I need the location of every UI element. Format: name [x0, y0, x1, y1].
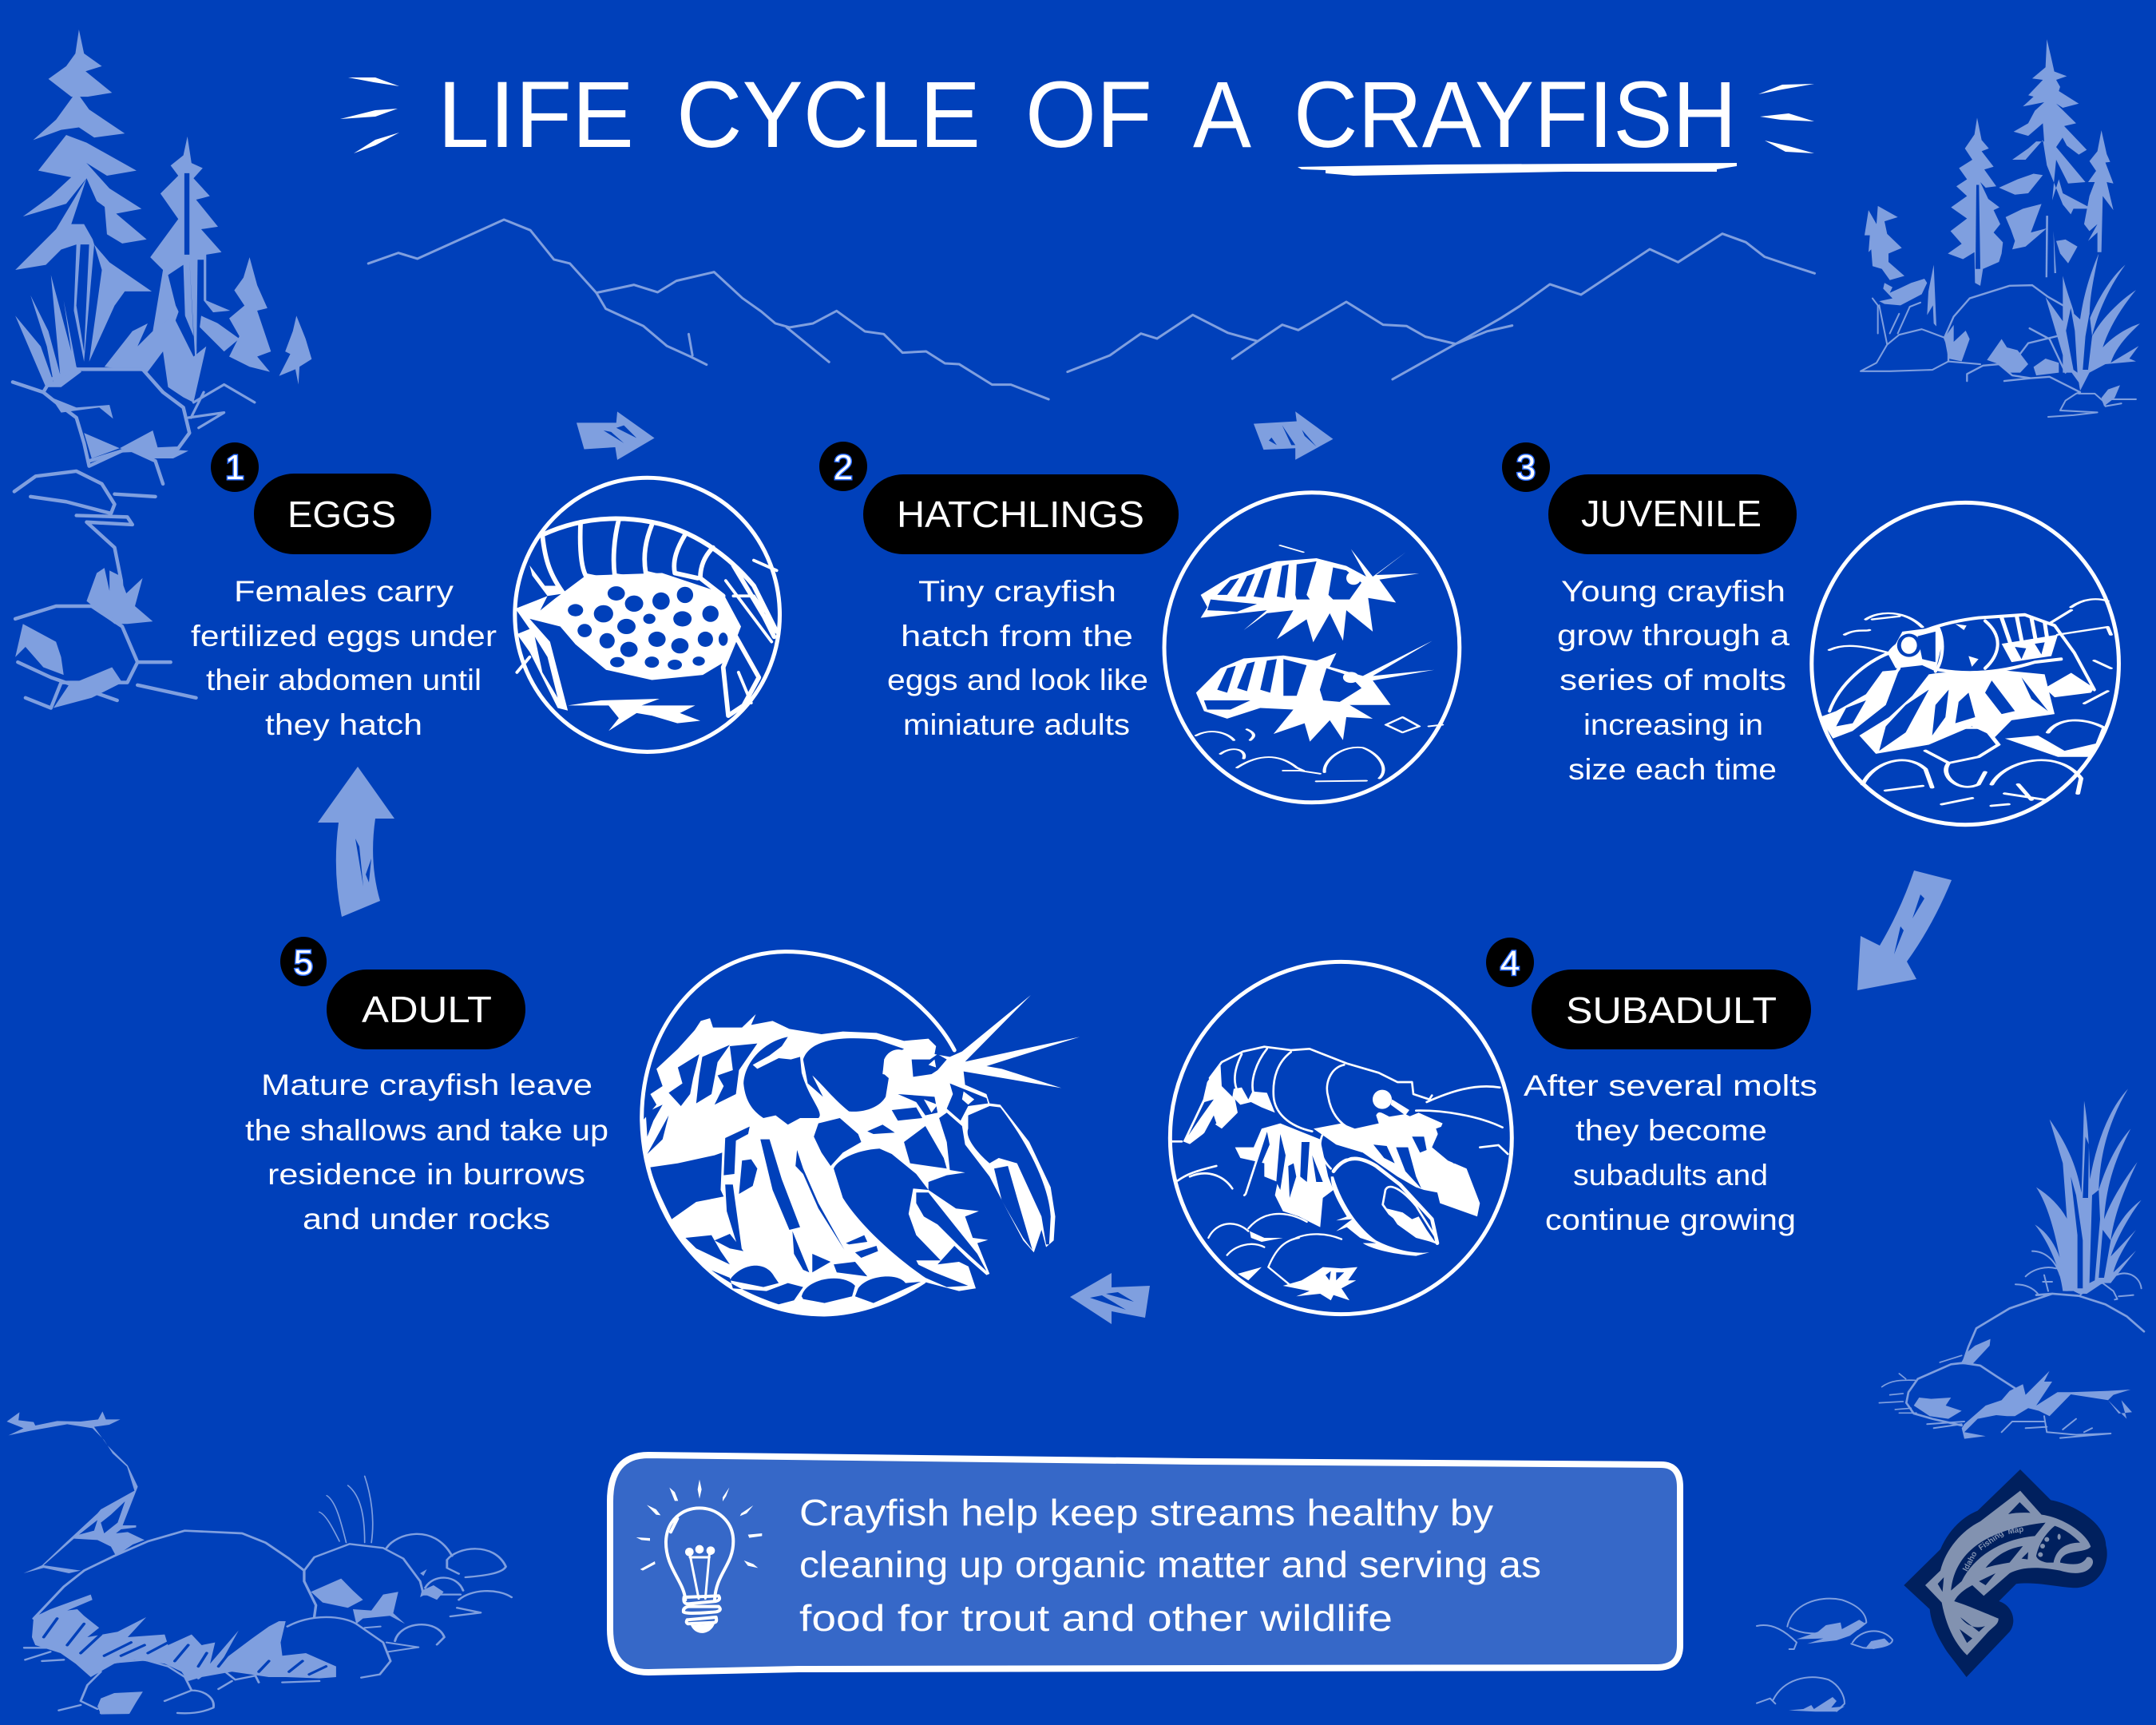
stage 3 description: increasing in: [1583, 708, 1763, 741]
title underline: [1298, 163, 1737, 176]
arrow: subadult to adult: [1070, 1273, 1150, 1324]
stage 5 description: residence in burrows: [268, 1158, 585, 1191]
stage 4 number badge: [1486, 938, 1534, 987]
title: [438, 62, 1737, 168]
stage 5 description: and under rocks: [303, 1203, 550, 1235]
stage 2: hatchlings: [819, 442, 1460, 803]
arrow: adult back to eggs: [318, 767, 394, 917]
stage 5 number badge: 5: [294, 943, 313, 982]
stage 1 description: they hatch: [265, 708, 422, 741]
logo: Idaho Fishing Map leaping fish: Idaho: [1961, 1550, 1979, 1573]
arrow: hatchlings to juvenile: [1254, 411, 1333, 460]
stage 5: adult: [245, 937, 1080, 1315]
stage 2 description: hatch from the: [901, 620, 1133, 652]
stage 3 number badge: 3: [1516, 448, 1536, 487]
stage 3 label pill: JUVENILE: [1581, 493, 1762, 534]
stage 4: subadult: [1170, 938, 1817, 1315]
logo: Idaho Fishing Map leaping fish: Map: [2007, 1525, 2024, 1537]
scenery: mountain range outlines: [368, 220, 1815, 399]
title: A: [1193, 62, 1251, 168]
stage 3: juvenile: [1502, 442, 2118, 825]
icon: light bulb: [636, 1480, 762, 1633]
stage 2 label pill: [863, 474, 1179, 554]
stage 3 description: size each time: [1568, 753, 1777, 786]
stage 5 description: the shallows and take up: [245, 1114, 608, 1147]
stage 5 description: Mature crayfish leave: [261, 1069, 593, 1101]
title emphasis marks right: [1758, 84, 1814, 153]
arrow: juvenile to subadult: [1857, 870, 1952, 990]
title: LIFE: [438, 62, 634, 168]
stage 2 number badge: 2: [834, 448, 853, 487]
stage 4 description: continue growing: [1545, 1204, 1796, 1236]
title: CYCLE: [676, 62, 981, 168]
stage 1 label pill: EGGS: [287, 494, 396, 535]
stage 4 description: After several molts: [1524, 1069, 1817, 1102]
stage 3 label pill: [1548, 474, 1797, 554]
stage 1 description: fertilized eggs under: [191, 620, 497, 652]
stage 2 description: [887, 575, 1148, 741]
scenery: forest and stream rocks top left: [13, 30, 311, 708]
callout: why crayfish matter: [610, 1455, 1680, 1672]
stage 5 label pill: ADULT: [362, 989, 492, 1030]
stage 5 number badge: [280, 937, 327, 986]
logo: Idaho Fishing Map leaping fish: Fishing: [1977, 1529, 2005, 1552]
stage 3 description: grow through a: [1557, 619, 1789, 652]
title: OF: [1025, 62, 1152, 168]
stage 1 number badge: [211, 442, 259, 492]
stage 2 description: Tiny crayfish: [918, 575, 1116, 608]
stage 1 label pill: [254, 474, 431, 554]
stage 4 illustration: subadult crayfish over rocks: [1170, 962, 1512, 1315]
stage 5 illustration: adult crayfish breaking out of circle: [642, 952, 1080, 1315]
stage 1 description: their abdomen until: [206, 664, 482, 696]
stage 1 number badge: 1: [225, 448, 244, 487]
stage 3 description: [1557, 575, 1789, 786]
title emphasis marks left: [340, 77, 399, 153]
stage 5 label pill: [327, 970, 525, 1049]
logo: Idaho Fishing Map leaping fish: [1904, 1469, 2107, 1677]
callout text: cleaning up organic matter and serving as: [799, 1544, 1541, 1585]
stage 3 illustration: juvenile crayfish over rocks: [1812, 502, 2118, 825]
stage 4 description: they become: [1575, 1114, 1767, 1147]
callout text: [799, 1492, 1541, 1639]
stage 4 label pill: [1532, 970, 1811, 1049]
stage 1: eggs: [191, 442, 779, 751]
stage 2 illustration: two hatchlings on rocks: [1164, 493, 1460, 803]
stage 4 description: [1524, 1069, 1817, 1236]
callout text: Crayfish help keep streams healthy by: [799, 1492, 1493, 1533]
title: CRAYFISH: [1294, 62, 1737, 168]
stage 3 number badge: [1502, 442, 1550, 492]
stage 4 number badge: 4: [1500, 944, 1520, 983]
scenery: small rocks bottom right: [1757, 1599, 1892, 1711]
stage 5 description: [245, 1069, 608, 1235]
scenery: forest and rocks top right: [1861, 39, 2140, 417]
stage 4 description: subadults and: [1573, 1159, 1768, 1192]
stage 1 illustration: crayfish carrying eggs: [515, 478, 779, 751]
stage 3 description: series of molts: [1560, 664, 1786, 696]
stage 2 description: eggs and look like: [887, 664, 1148, 696]
scenery: grass and rocks middle right: [1879, 1089, 2144, 1439]
stage 1 description: Females carry: [234, 575, 454, 608]
arrow: eggs to hatchlings: [577, 411, 655, 460]
stage 1 description: [191, 575, 497, 741]
scenery: rocks and grass bottom left: [6, 1411, 512, 1715]
stage 2 label pill: HATCHLINGS: [897, 494, 1144, 535]
stage 2 description: miniature adults: [903, 708, 1130, 741]
stage 2 number badge: [819, 442, 867, 491]
stage 4 label pill: SUBADULT: [1566, 989, 1777, 1031]
callout text: food for trout and other wildlife: [799, 1597, 1393, 1639]
stage 3 description: Young crayfish: [1561, 575, 1785, 608]
